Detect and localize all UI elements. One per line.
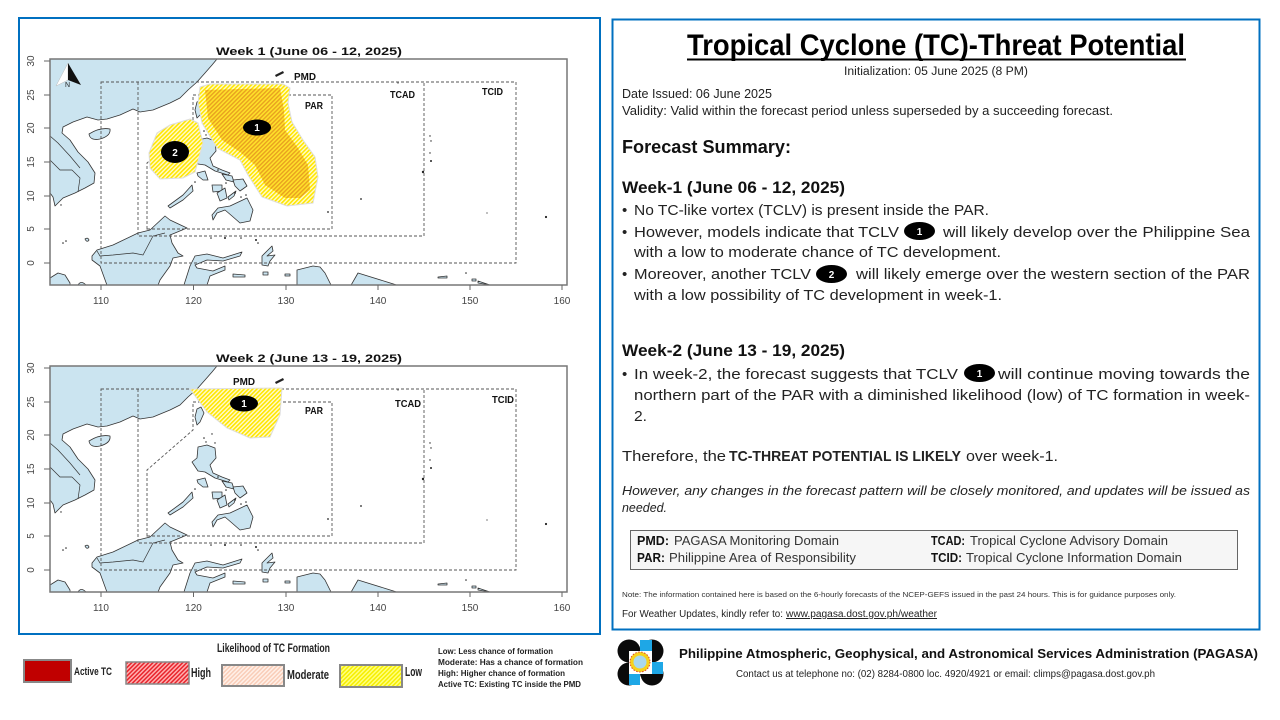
date issued and validity: Date Issued: 06 June 2025: [622, 87, 772, 101]
legend definitions: Moderate: Has a chance of formation: [438, 658, 583, 667]
map: week 1: [26, 46, 571, 307]
text: week-2 bullets: [622, 364, 1250, 425]
inline marker 1: 1: [917, 227, 923, 238]
domain labels: week 2: PAR: [305, 406, 324, 417]
axis labels: week 1: 140: [370, 296, 387, 307]
text: week-2 bullets: will continue moving towards the: [997, 366, 1250, 383]
footnote: Note: The information contained here is based on the 6-hourly forecasts of the NCEP-GEFS issued in the past 24 hours. This is for guidance purposes only.: [622, 590, 1176, 599]
map heading: week 1: Week 1 (June 06 - 12, 2025): [216, 46, 402, 58]
initialization: Initialization: 05 June 2025 (8 PM): [844, 66, 1028, 78]
domain key box: PAR:: [637, 551, 665, 565]
axis labels: week 1: 5: [26, 226, 37, 232]
legend item: high: High: [191, 665, 211, 680]
axis labels: week 2: 0: [26, 567, 37, 573]
domain labels: week 1: TCAD: [390, 90, 415, 101]
legend item: moderate: [222, 665, 329, 686]
text: week-2 bullets: •: [622, 366, 627, 383]
axis labels: week 2: 10: [26, 497, 37, 509]
domain key box: Tropical Cyclone Advisory Domain: [970, 534, 1168, 548]
legend item: moderate: Moderate: [287, 667, 329, 682]
domain labels: week 1: [294, 72, 503, 112]
weather updates link: www.pagasa.dost.gov.ph/weather: [785, 609, 938, 620]
inline marker 1: [964, 364, 995, 382]
domain key box: TCID:: [931, 551, 962, 565]
axis labels: week 2: 5: [26, 533, 37, 539]
inline marker 1: [904, 222, 935, 240]
title: Tropical Cyclone (TC)-Threat Potential: [687, 29, 1185, 62]
axis labels: week 2: [26, 362, 571, 614]
inline marker 2: [816, 265, 847, 283]
text: week-1 bullets: will likely emerge over the western section of the PAR: [855, 266, 1250, 283]
text: monitoring note: [622, 484, 1250, 515]
legend definitions: Low: Less chance of formation: [438, 647, 553, 656]
marker: TCLV 2: 2: [172, 148, 178, 159]
heading: week-2: Week-2 (June 13 - 19, 2025): [622, 341, 845, 360]
axis labels: week 2: 120: [185, 603, 202, 614]
legend item: active TC: [24, 660, 112, 682]
axis labels: week 1: 25: [26, 89, 37, 101]
axis labels: week 1: 160: [554, 296, 571, 307]
axis labels: week 1: 110: [93, 296, 109, 307]
legend heading: Likelihood of TC Formation: [217, 641, 330, 655]
legend item: low: Low: [405, 664, 423, 679]
marker: TCLV 1: 1: [241, 399, 247, 410]
domain labels: week 1: TCID: [482, 87, 503, 98]
legend: likelihood of TC formation: [24, 641, 583, 689]
legend item: active TC: Active TC: [74, 666, 112, 678]
axis labels: week 2: 150: [462, 603, 479, 614]
legend definitions: [438, 647, 583, 689]
domain labels: week 2: [233, 377, 514, 417]
text: conclusion: TC-THREAT POTENTIAL IS LIKELY: [729, 448, 961, 465]
axis labels: week 2: 15: [26, 463, 37, 475]
panel: forecast text: [612, 20, 1260, 630]
text: week-2 bullets: northern part of the PAR with a diminished likelihood (low) of TC formation in week-: [634, 387, 1250, 404]
date issued and validity: Validity: Valid within the forecast period unless superseded by a succeeding forecast.: [622, 104, 1113, 118]
domain key box: Tropical Cyclone Information Domain: [966, 551, 1182, 565]
axis labels: week 2: 140: [370, 603, 387, 614]
footer: contact: Contact us at telephone no: (02) 8284-0800 loc. 4920/4921 or email: climps@pagasa.dost.gov.ph: [736, 669, 1155, 680]
domain labels: week 2: PMD: [233, 377, 255, 388]
text: week-1 bullets: No TC-like vortex (TCLV) is present inside the PAR.: [634, 202, 989, 219]
marker: TCLV 2: [161, 141, 189, 163]
axis labels: week 2: 110: [93, 603, 109, 614]
domain key box: PMD:: [637, 534, 669, 548]
heading: forecast summary: Forecast Summary:: [622, 137, 791, 157]
domain key box: TCAD:: [931, 534, 965, 548]
axis labels: week 1: 150: [462, 296, 479, 307]
domain labels: week 2: TCID: [492, 395, 514, 406]
axis labels: week 1: 0: [26, 260, 37, 266]
icon: north arrow: N: [65, 82, 70, 89]
text: week-1 bullets: with a low to moderate chance of TC development.: [633, 244, 1001, 261]
marker: TCLV 1: 1: [254, 123, 260, 134]
text: conclusion: [622, 448, 1058, 465]
map heading: week 2: Week 2 (June 13 - 19, 2025): [216, 353, 402, 365]
footer: agency name: Philippine Atmospheric, Geophysical, and Astronomical Services Administration (PAGASA): [679, 647, 1258, 661]
axis labels: week 2: 25: [26, 396, 37, 408]
weather updates link: [622, 609, 938, 620]
threat area 1: low to moderate: [198, 84, 318, 206]
axis labels: week 2: 130: [278, 603, 295, 614]
domain key box: [630, 530, 1238, 570]
text: conclusion: over week-1.: [966, 448, 1058, 465]
text: monitoring note: needed.: [622, 501, 667, 515]
text: week-2 bullets: 2.: [634, 408, 647, 425]
axis labels: week 1: 30: [26, 55, 37, 67]
legend definitions: High: Higher chance of formation: [438, 669, 565, 678]
axis labels: week 1: 15: [26, 156, 37, 168]
domain key box: Philippine Area of Responsibility: [669, 551, 857, 565]
map: week 2: [26, 353, 571, 614]
text: conclusion: Therefore, the: [622, 448, 726, 465]
marker: TCLV 1: [243, 120, 271, 136]
threat area 2: low: [149, 119, 203, 179]
text: monitoring note: However, any changes in the forecast pattern will be closely monitored, and updates will be issued as: [622, 484, 1250, 498]
text: week-1 bullets: with a low possibility of TC development in week-1.: [633, 287, 1002, 304]
marker: TCLV 1: [230, 396, 258, 412]
axis labels: week 1: 120: [185, 296, 202, 307]
text: week-1 bullets: Moreover, another TCLV: [634, 266, 811, 283]
panel: forecast maps: [19, 18, 600, 634]
text: week-1 bullets: •: [622, 202, 627, 219]
axis labels: week 1: 130: [278, 296, 295, 307]
domain key box: PAGASA Monitoring Domain: [674, 534, 839, 548]
text: week-1 bullets: •: [622, 266, 627, 283]
inline marker 2: 2: [829, 270, 835, 281]
weather updates link: For Weather Updates, kindly refer to:: [622, 609, 783, 620]
text: week-2 bullets: In week-2, the forecast suggests that TCLV: [634, 366, 958, 383]
domain labels: week 2: TCAD: [395, 399, 421, 410]
text: week-1 bullets: •: [622, 224, 627, 241]
icon: north arrow: [56, 63, 81, 89]
threat area 1: low: [190, 388, 282, 438]
axis labels: week 2: 160: [554, 603, 571, 614]
axis labels: week 1: 20: [26, 122, 37, 134]
legend item: low: [340, 664, 423, 687]
heading: week-1: Week-1 (June 06 - 12, 2025): [622, 178, 845, 197]
legend definitions: Active TC: Existing TC inside the PMD: [438, 680, 581, 689]
domain labels: week 1: PAR: [305, 101, 324, 112]
text: week-1 bullets: [622, 202, 1251, 304]
axis labels: week 2: 30: [26, 362, 37, 374]
axis labels: week 1: [26, 55, 571, 307]
domain labels: week 1: PMD: [294, 72, 316, 83]
axis labels: week 1: 10: [26, 190, 37, 202]
text: week-1 bullets: will likely develop over the Philippine Sea: [942, 224, 1251, 241]
text: week-1 bullets: However, models indicate that TCLV: [634, 224, 899, 241]
icon: PAGASA logo: [618, 640, 664, 686]
axis labels: week 2: 20: [26, 429, 37, 441]
inline marker 1: 1: [977, 369, 983, 380]
legend item: high: [126, 662, 211, 684]
date issued and validity: [622, 87, 1113, 118]
